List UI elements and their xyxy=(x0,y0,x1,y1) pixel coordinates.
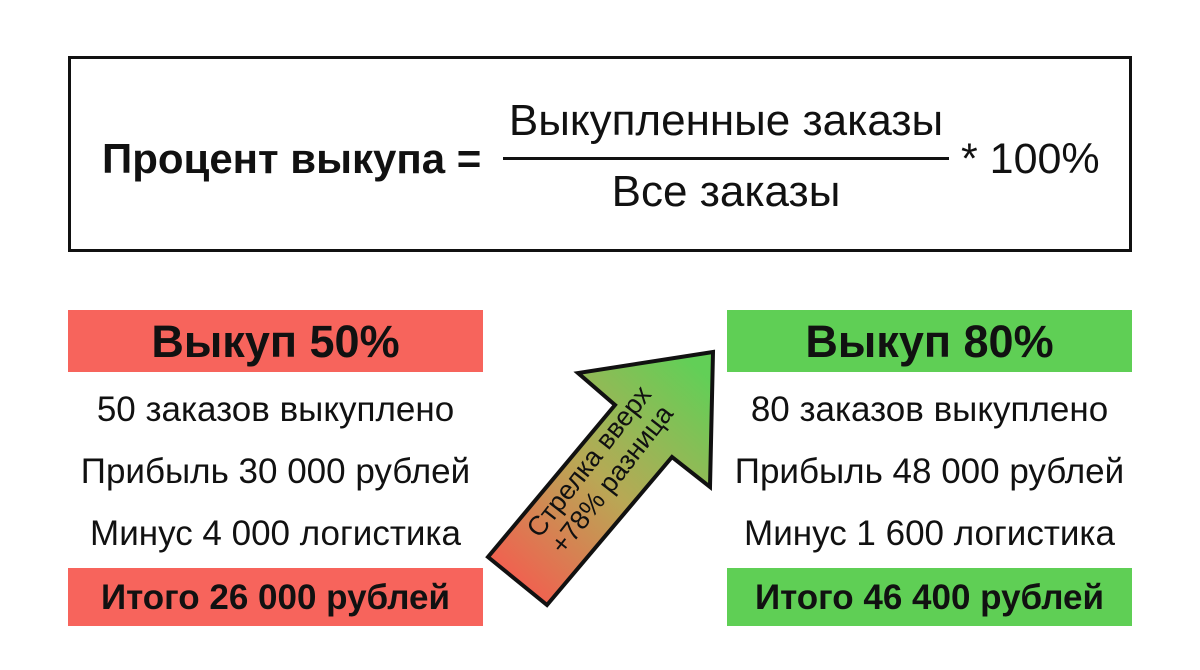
header xyxy=(727,310,1132,372)
lines: 50 заказов выкуплено xyxy=(97,390,454,429)
header: Выкуп 80% xyxy=(805,316,1054,367)
header xyxy=(68,310,483,372)
lines xyxy=(735,390,1124,553)
lines: Минус 1 600 логистика xyxy=(744,514,1115,553)
lines xyxy=(81,390,470,553)
multiplier: * 100% xyxy=(961,135,1100,183)
formula label: Процент выкупа = xyxy=(102,135,481,182)
header: Выкуп 50% xyxy=(151,316,400,367)
fraction line xyxy=(503,157,949,160)
arrow text: +78% разница xyxy=(545,398,680,559)
numerator: Выкупленные заказы xyxy=(509,96,943,145)
total: Итого 46 400 рублей xyxy=(755,578,1104,617)
lines: Прибыль 48 000 рублей xyxy=(735,452,1124,491)
arrow text: Стрелка вверх xyxy=(521,380,658,543)
panel: 80% xyxy=(727,310,1132,626)
denominator: Все заказы xyxy=(612,167,840,216)
lines: 80 заказов выкуплено xyxy=(751,390,1108,429)
total: Итого 26 000 рублей xyxy=(101,578,450,617)
total xyxy=(68,568,483,626)
lines: Прибыль 30 000 рублей xyxy=(81,452,470,491)
total xyxy=(727,568,1132,626)
panel: 50% xyxy=(68,310,483,626)
formula box xyxy=(68,56,1132,252)
lines: Минус 4 000 логистика xyxy=(90,514,461,553)
